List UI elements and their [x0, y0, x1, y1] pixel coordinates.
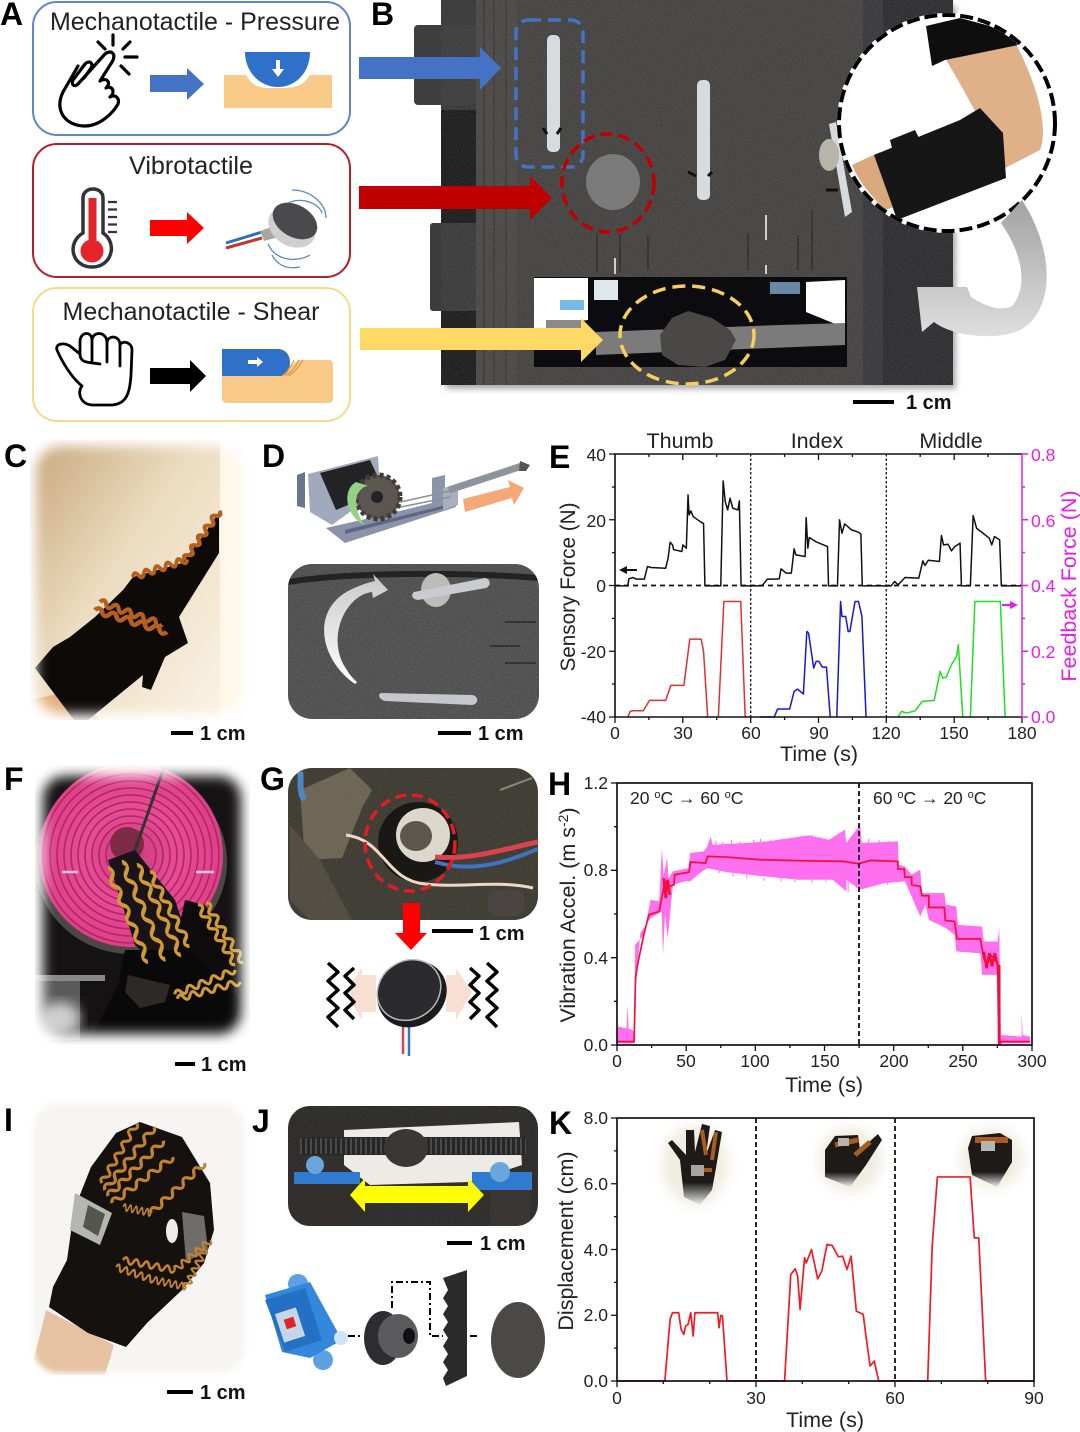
- photo: glove making fist: [28, 1098, 250, 1378]
- velcro: [300, 768, 372, 860]
- scale bar G: [432, 923, 525, 945]
- inset: half closed hand: [818, 1128, 882, 1192]
- axes: [617, 783, 1032, 1045]
- icon: pressure on skin: [224, 52, 332, 108]
- panel label F: F: [4, 761, 24, 797]
- x tick labels: 250: [948, 1051, 978, 1071]
- y tick labels: -40: [581, 707, 606, 727]
- icon: thermometer: [73, 189, 117, 267]
- dashed highlight: [365, 795, 455, 891]
- y tick labels: 0.8: [584, 860, 608, 880]
- upper arm skin: [945, 42, 1043, 168]
- x tick labels: 120: [871, 723, 901, 743]
- servos: [294, 1156, 532, 1190]
- y tick labels: 1.2: [584, 773, 608, 793]
- scale bar B: [853, 392, 952, 414]
- gear: [356, 475, 400, 519]
- x tick labels: 200: [879, 1051, 909, 1071]
- heading: pressure: Mechanotactile - Pressure: [50, 8, 340, 36]
- inset: open hand: [662, 1124, 728, 1205]
- arrow: orange travel: [463, 480, 524, 512]
- arrow: curved white: [324, 574, 388, 684]
- electronics chip: [70, 1193, 112, 1245]
- y tick labels: 40: [587, 445, 606, 465]
- pale arrows: [345, 968, 472, 1020]
- serpentine traces: [99, 1122, 212, 1290]
- finger headers: Middle: [919, 429, 983, 453]
- panel: vibrotactile: [33, 144, 350, 277]
- panel label C: C: [4, 438, 27, 474]
- foam knob: [491, 1302, 545, 1378]
- cutout window with belt: [534, 277, 847, 367]
- scale bar B: 1 cm: [906, 392, 952, 414]
- upper cuff: [926, 18, 1018, 66]
- axis titles: Time (s): [780, 742, 858, 766]
- scale bar F: 1 cm: [201, 1054, 247, 1076]
- glove body: [49, 1122, 214, 1347]
- actuator: flat: [379, 693, 477, 705]
- x tick labels: 90: [809, 723, 829, 743]
- scale bar J: [447, 1233, 526, 1255]
- arrow: blue pointer: [359, 47, 501, 90]
- icon: shear on skin: [222, 349, 333, 403]
- scale bar I: [167, 1382, 246, 1404]
- scale bar D: [438, 723, 524, 745]
- icon: fist: [57, 333, 132, 405]
- scale bar C: [171, 723, 246, 745]
- right tick labels: 0.6: [1031, 511, 1055, 531]
- panel label H: H: [548, 766, 571, 802]
- annotation: heating: C: [731, 788, 743, 808]
- x tick labels: 0: [612, 1388, 622, 1408]
- x tick labels: 0: [610, 723, 620, 743]
- scale bar C: 1 cm: [200, 723, 246, 745]
- annotation: cooling: C: [974, 788, 986, 808]
- y tick labels: 0.0: [584, 1035, 608, 1055]
- chart: sensory and feedback force: [556, 429, 1080, 766]
- photo: glove pressing, side view: [30, 440, 250, 720]
- dividers: [756, 1118, 895, 1381]
- inset: arm wearing sleeve: [839, 15, 1055, 231]
- annotation: cooling: o: [968, 789, 974, 801]
- arrow: blue: [150, 68, 204, 100]
- arm: [30, 1310, 114, 1375]
- chart: vibration acceleration: [555, 773, 1047, 1097]
- chart: displacement: [554, 1108, 1044, 1432]
- x tick labels: 100: [740, 1051, 770, 1071]
- belt: [300, 1137, 526, 1155]
- zigzag left: [328, 963, 354, 1027]
- annotation: heating: 20: [630, 788, 649, 808]
- velcro tabs: [414, 25, 482, 311]
- rack: [443, 1270, 467, 1386]
- panel: sleeve photo B: [414, 0, 956, 389]
- y tick labels: [581, 445, 606, 727]
- divider lines: [751, 454, 886, 717]
- panel: mechanotactile pressure: [33, 2, 350, 135]
- divider: [858, 783, 860, 1045]
- motor body: [364, 947, 460, 1056]
- white opening: [344, 1122, 522, 1185]
- x tick labels: [612, 1388, 1044, 1408]
- arrow: red: [150, 212, 204, 244]
- right tick labels: [1031, 445, 1056, 727]
- arrow: yellow double: [350, 1178, 484, 1212]
- zigzag right: [470, 963, 497, 1027]
- chart: vibration acceleration: -2: [555, 814, 571, 827]
- icon: vibration motor: [226, 190, 326, 268]
- annotation: heating: o: [654, 789, 660, 801]
- finger headers: Thumb: [647, 429, 713, 453]
- data trace: [617, 1177, 1034, 1381]
- x tick labels: 30: [673, 723, 693, 743]
- finger headers: Index: [791, 429, 844, 453]
- photo: glove over hot plate: [35, 763, 250, 1045]
- x tick labels: 60: [741, 723, 761, 743]
- heating coil: [39, 763, 223, 947]
- y tick labels: 20: [587, 511, 606, 531]
- chart: displacement: Displacement (cm): [554, 1151, 578, 1331]
- scale bar F: [175, 1054, 247, 1076]
- scale bar J: 1 cm: [480, 1233, 526, 1255]
- x tick labels: 0: [612, 1051, 622, 1071]
- silicone actuators: [547, 35, 852, 217]
- scale bar G: 1 cm: [479, 923, 525, 945]
- y tick labels: 4.0: [584, 1240, 608, 1260]
- panel label D: D: [262, 438, 285, 474]
- arrow: green rotation: [347, 482, 368, 525]
- inset: closed fist: [960, 1128, 1024, 1188]
- knob: [384, 1129, 428, 1167]
- right tick labels: 0.8: [1031, 445, 1055, 465]
- heading: shear: Mechanotactile - Shear: [62, 298, 320, 326]
- left arrow marker: [619, 566, 637, 574]
- heading: vibrotactile: Vibrotactile: [129, 152, 253, 180]
- pocket: [378, 802, 458, 882]
- finger headers: [647, 429, 983, 453]
- pulley: [364, 1311, 418, 1365]
- arrow: red down: [395, 903, 427, 950]
- y tick labels: [584, 773, 608, 1055]
- y tick labels: 0.0: [584, 1371, 608, 1391]
- dashed highlight: pressure: [516, 20, 583, 167]
- sleeve: [874, 108, 1006, 220]
- x tick labels: 300: [1017, 1051, 1047, 1071]
- y tick labels: 6.0: [584, 1174, 608, 1194]
- axis titles: Time (s): [785, 1073, 863, 1097]
- panel label E: E: [549, 439, 570, 475]
- y tick labels: [584, 1108, 608, 1391]
- right tick labels: 0.4: [1031, 576, 1056, 596]
- y tick labels: 8.0: [584, 1108, 608, 1128]
- forearm skin: [852, 152, 900, 210]
- right tick labels: 0.0: [1031, 707, 1056, 727]
- y tick labels: 0.4: [584, 948, 608, 968]
- illustration: vibrating motor: [328, 947, 497, 1056]
- axis titles: Time (s): [786, 1408, 864, 1432]
- y tick labels: -20: [581, 642, 606, 662]
- data traces: [615, 481, 1022, 717]
- arrow: curved gray: [917, 200, 1047, 336]
- illustration: servo rack actuator: [297, 456, 530, 543]
- thumb actuator: [182, 1212, 208, 1262]
- x tick labels: 60: [885, 1388, 905, 1408]
- data band and mean: [617, 825, 1030, 1045]
- illustration: exploded shear actuator: [265, 1270, 545, 1386]
- annotation: heating: → 60: [678, 788, 720, 808]
- x tick labels: 90: [1024, 1388, 1044, 1408]
- panel label I: I: [4, 1102, 13, 1138]
- seam threads: [597, 210, 812, 272]
- chart: vibration acceleration: Vibration Accel. (m s: [556, 827, 580, 1023]
- y tick labels: 2.0: [584, 1305, 608, 1325]
- dashed highlight: vibration: [562, 134, 654, 232]
- icon: pointing hand: [60, 35, 137, 126]
- vibration pad: [586, 154, 640, 210]
- dashed highlight: shear: [620, 286, 754, 384]
- servo: [265, 1274, 348, 1370]
- panel label J: J: [252, 1103, 270, 1139]
- connector lines: [348, 1282, 480, 1336]
- annotation: cooling: C: [903, 788, 916, 808]
- photo: fabric with relocated actuators: [288, 564, 539, 719]
- photo: motor embedded in fabric: [288, 768, 538, 920]
- actuator: with bubble: [412, 573, 490, 607]
- axes: [617, 1118, 1034, 1381]
- thumb hole: [166, 1219, 178, 1243]
- annotation: cooling: 60: [873, 788, 892, 808]
- right arrow marker: [1002, 601, 1018, 609]
- annotation: cooling: o: [897, 789, 903, 801]
- arrow: dark red pointer: [359, 176, 552, 220]
- arrow: black: [150, 360, 206, 392]
- annotation: cooling: → 20: [921, 788, 963, 808]
- x tick labels: 150: [939, 723, 969, 743]
- glove fingers: [96, 850, 244, 1030]
- x tick labels: [610, 723, 1037, 743]
- x tick labels: 150: [810, 1051, 840, 1071]
- traces: [94, 509, 222, 635]
- axes: [615, 454, 1022, 717]
- scale bar I: 1 cm: [200, 1382, 246, 1404]
- x tick labels: 50: [676, 1051, 696, 1071]
- wires: [435, 842, 538, 858]
- x tick labels: 180: [1007, 723, 1037, 743]
- arrow: yellow pointer: [360, 318, 603, 362]
- panel label G: G: [260, 761, 285, 797]
- actuator clips: [543, 128, 838, 190]
- marks at right: [490, 622, 536, 663]
- panel: mechanotactile shear: [33, 288, 350, 421]
- annotation: heating: C: [660, 788, 673, 808]
- chart: sensory and feedback force: Sensory Force (N): [556, 502, 580, 672]
- annotation: heating: o: [725, 789, 731, 801]
- chart: vibration acceleration: ): [556, 807, 580, 815]
- lower pads: [290, 1186, 358, 1226]
- x tick labels: 30: [746, 1388, 766, 1408]
- panel label K: K: [549, 1105, 572, 1141]
- photo: shear actuator belt: [288, 1106, 538, 1226]
- scale bar D: 1 cm: [478, 723, 524, 745]
- right tick labels: 0.2: [1031, 642, 1055, 662]
- y tick labels: 0: [596, 576, 606, 596]
- x tick labels: [612, 1051, 1047, 1071]
